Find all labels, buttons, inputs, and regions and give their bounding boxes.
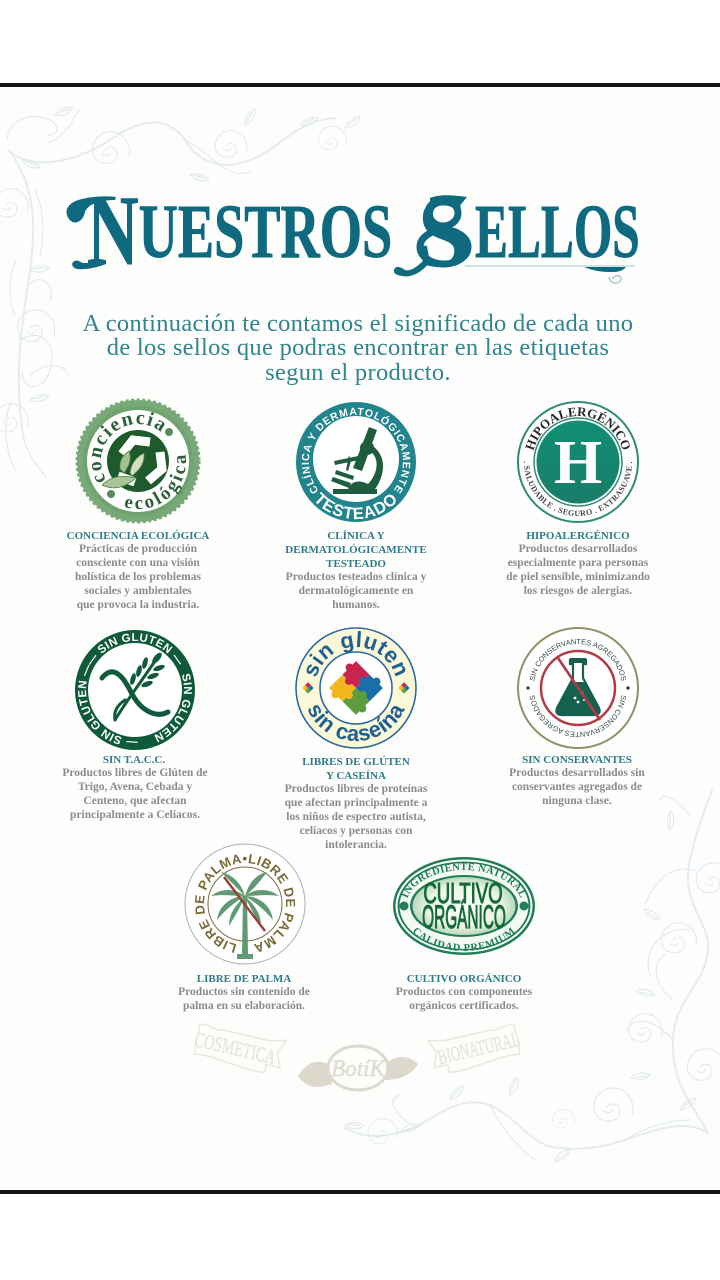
logo: Boti K oval: BotíK <box>331 1056 386 1081</box>
captions: libres de glúten y caseína: LIBRES DE GLÚTEN <box>302 756 410 768</box>
title <box>67 175 640 288</box>
captions: conciencia ecológica: Prácticas de producción <box>79 543 198 555</box>
captions: hipoalergénico: especialmente para personas <box>508 557 649 569</box>
seal: sin gluten sin caseína: sin caseína <box>308 705 405 742</box>
captions: conciencia ecológica: sociales y ambientales <box>84 585 192 597</box>
captions: clínica: Productos testeados clínica y <box>286 571 427 583</box>
captions: sin conservantes <box>509 754 645 807</box>
captions: sin TACC: SIN T.A.C.C. <box>103 754 165 766</box>
icon: leaves <box>102 451 144 488</box>
captions: conciencia ecológica <box>67 530 209 611</box>
title: S <box>418 177 468 288</box>
captions: clínica <box>285 530 427 611</box>
captions: libres de glúten y caseína: Y CASEÍNA <box>326 770 386 782</box>
captions: cultivo orgánico: orgánicos certificados. <box>409 1000 519 1012</box>
seal: cultivo orgánico: CALIDAD PREMIUM <box>414 927 515 952</box>
logo: cosmética banner: COSMETICA <box>193 1027 278 1069</box>
seal: sin conservantes <box>517 627 639 749</box>
captions: cultivo orgánico: Productos con componentes <box>396 986 533 998</box>
captions: hipoalergénico: HIPOALERGÉNICO <box>526 530 630 542</box>
captions: clínica: humanos. <box>332 599 380 611</box>
seal: cultivo orgánico: ORGÁNICO <box>422 899 506 936</box>
seal: cultivo orgánico: INGREDIENTE NATURAL <box>402 863 526 898</box>
seal: sin gluten TACC: — SIN GLUTEN — <box>78 664 138 744</box>
icon: small leaves <box>107 428 173 498</box>
icon: crossed wheat <box>102 658 168 720</box>
captions: sin TACC: Trigo, Avena, Cebada y <box>78 781 192 793</box>
icon: recycle arrows <box>118 440 162 482</box>
captions: libre de palma: palma en su elaboración. <box>183 1000 305 1012</box>
intro text: A continuación te contamos el significado de cada uno <box>83 310 633 337</box>
intro text: de los sellos que podras encontrar en las etiquetas <box>107 334 609 361</box>
logo: cosmética banner <box>191 1020 286 1076</box>
captions: cultivo orgánico: CULTIVO ORGÁNICO <box>407 973 522 985</box>
captions: sin TACC <box>62 754 208 821</box>
title: N <box>87 175 139 286</box>
captions: sin TACC: principalmente a Celíacos. <box>70 809 200 821</box>
seal: libre de palma: LIBRE DE PALMA•LIBRE DE PALMA <box>194 854 296 953</box>
seal: sin gluten TACC <box>75 630 195 750</box>
captions: sin conservantes: ninguna clase. <box>542 795 612 807</box>
seal: hipoalergénico: . SALUDABLE . SEGURO . EXTRASUAVE . <box>524 462 632 516</box>
icon: microscope <box>331 427 383 494</box>
seal: hipoalergénico: HIPOALERGÉNICO <box>525 407 630 451</box>
flourish: bottom right corner <box>345 790 720 1162</box>
seal: cultivo orgánico <box>393 857 535 955</box>
logo: Boti K oval <box>298 1046 418 1090</box>
captions: conciencia ecológica: consciente con una visión <box>76 557 200 569</box>
logo: bionatural banner <box>428 1020 523 1076</box>
icon: small puzzles <box>302 682 410 694</box>
captions: hipoalergénico <box>506 530 650 597</box>
seal: hipoalergénico <box>517 401 639 523</box>
captions: sin conservantes: conservantes agregados de <box>512 781 642 793</box>
seal: cultivo orgánico: CULTIVO <box>423 878 503 910</box>
captions: hipoalergénico: los riesgos de alergias. <box>524 585 632 597</box>
captions: libres de glúten y caseína: que afectan principalmente a <box>285 797 428 809</box>
captions: sin conservantes: Productos desarrollados sin <box>509 767 645 779</box>
ornate S loops <box>420 200 468 264</box>
captions: libre de palma: Productos sin contenido de <box>178 986 310 998</box>
captions: sin TACC: Centeno, que afectan <box>83 795 187 807</box>
captions: libres de glúten y caseína <box>285 756 428 851</box>
intro text: segun el producto. <box>265 359 451 386</box>
captions: cultivo orgánico <box>396 973 533 1012</box>
seal: conciencia ecológica: ecológica <box>124 454 186 510</box>
captions: libre de palma <box>178 973 310 1012</box>
captions: sin conservantes: SIN CONSERVANTES <box>522 754 632 766</box>
seal: sin gluten sin caseína: sin gluten <box>306 631 406 676</box>
captions: hipoalergénico: Productos desarrollados <box>519 543 638 555</box>
seal: conciencia ecológica <box>76 398 200 524</box>
captions: libres de glúten y caseína: Productos libres de proteínas <box>285 783 428 795</box>
logo: bionatural banner: BIONATURAL <box>435 1027 522 1069</box>
captions: clínica: DERMATOLÓGICAMENTE <box>285 544 427 556</box>
title: ELLOS <box>475 189 640 274</box>
captions: libres de glúten y caseína: los niños de espectro autista, <box>286 811 426 823</box>
captions: hipoalergénico: de piel sensible, minimizando <box>506 571 650 583</box>
captions: libres de glúten y caseína: celíacos y personas con <box>300 825 413 837</box>
seal: sin conservantes: SIN CONSERVANTES AGREGADOS <box>530 695 626 738</box>
seal: sin gluten sin caseína <box>295 627 417 749</box>
captions: libre de palma: LIBRE DE PALMA <box>197 973 291 985</box>
seal: sin gluten TACC: SIN GLUTEN <box>154 674 192 742</box>
flourish: top left corner <box>0 106 362 478</box>
captions: conciencia ecológica: CONCIENCIA ECOLÓGICA <box>67 530 209 542</box>
icon: palm tree <box>211 872 279 959</box>
icon: puzzle <box>323 655 389 721</box>
captions: sin TACC: Productos libres de Glúten de <box>62 767 208 779</box>
captions: conciencia ecológica: holística de los problemas <box>75 571 202 583</box>
captions: conciencia ecológica: que provoca la industria. <box>77 599 199 611</box>
title: UESTROS <box>139 190 392 274</box>
seal: sin gluten TACC: — SIN GLUTEN — <box>88 633 181 665</box>
captions: clínica: CLÍNICA Y <box>327 530 385 542</box>
captions: clínica: TESTEADO <box>326 558 386 570</box>
seal: conciencia ecológica: conciencia <box>92 412 164 482</box>
captions: libres de glúten y caseína: intolerancia. <box>325 839 387 851</box>
seal: clínica y dermatológicamente testeado: TESTEADO <box>316 492 396 520</box>
seal: hipoalergénico: H <box>554 429 602 497</box>
intro text <box>83 310 633 386</box>
captions: clínica: dermatológicamente en <box>299 585 414 597</box>
icon: flask <box>556 658 600 715</box>
seal: clínica y dermatológicamente testeado: CLÍNICA Y DERMATOLÓGICAMENTE <box>302 408 410 494</box>
seal: sin conservantes: SIN CONSERVANTES AGREGADOS <box>530 638 626 681</box>
